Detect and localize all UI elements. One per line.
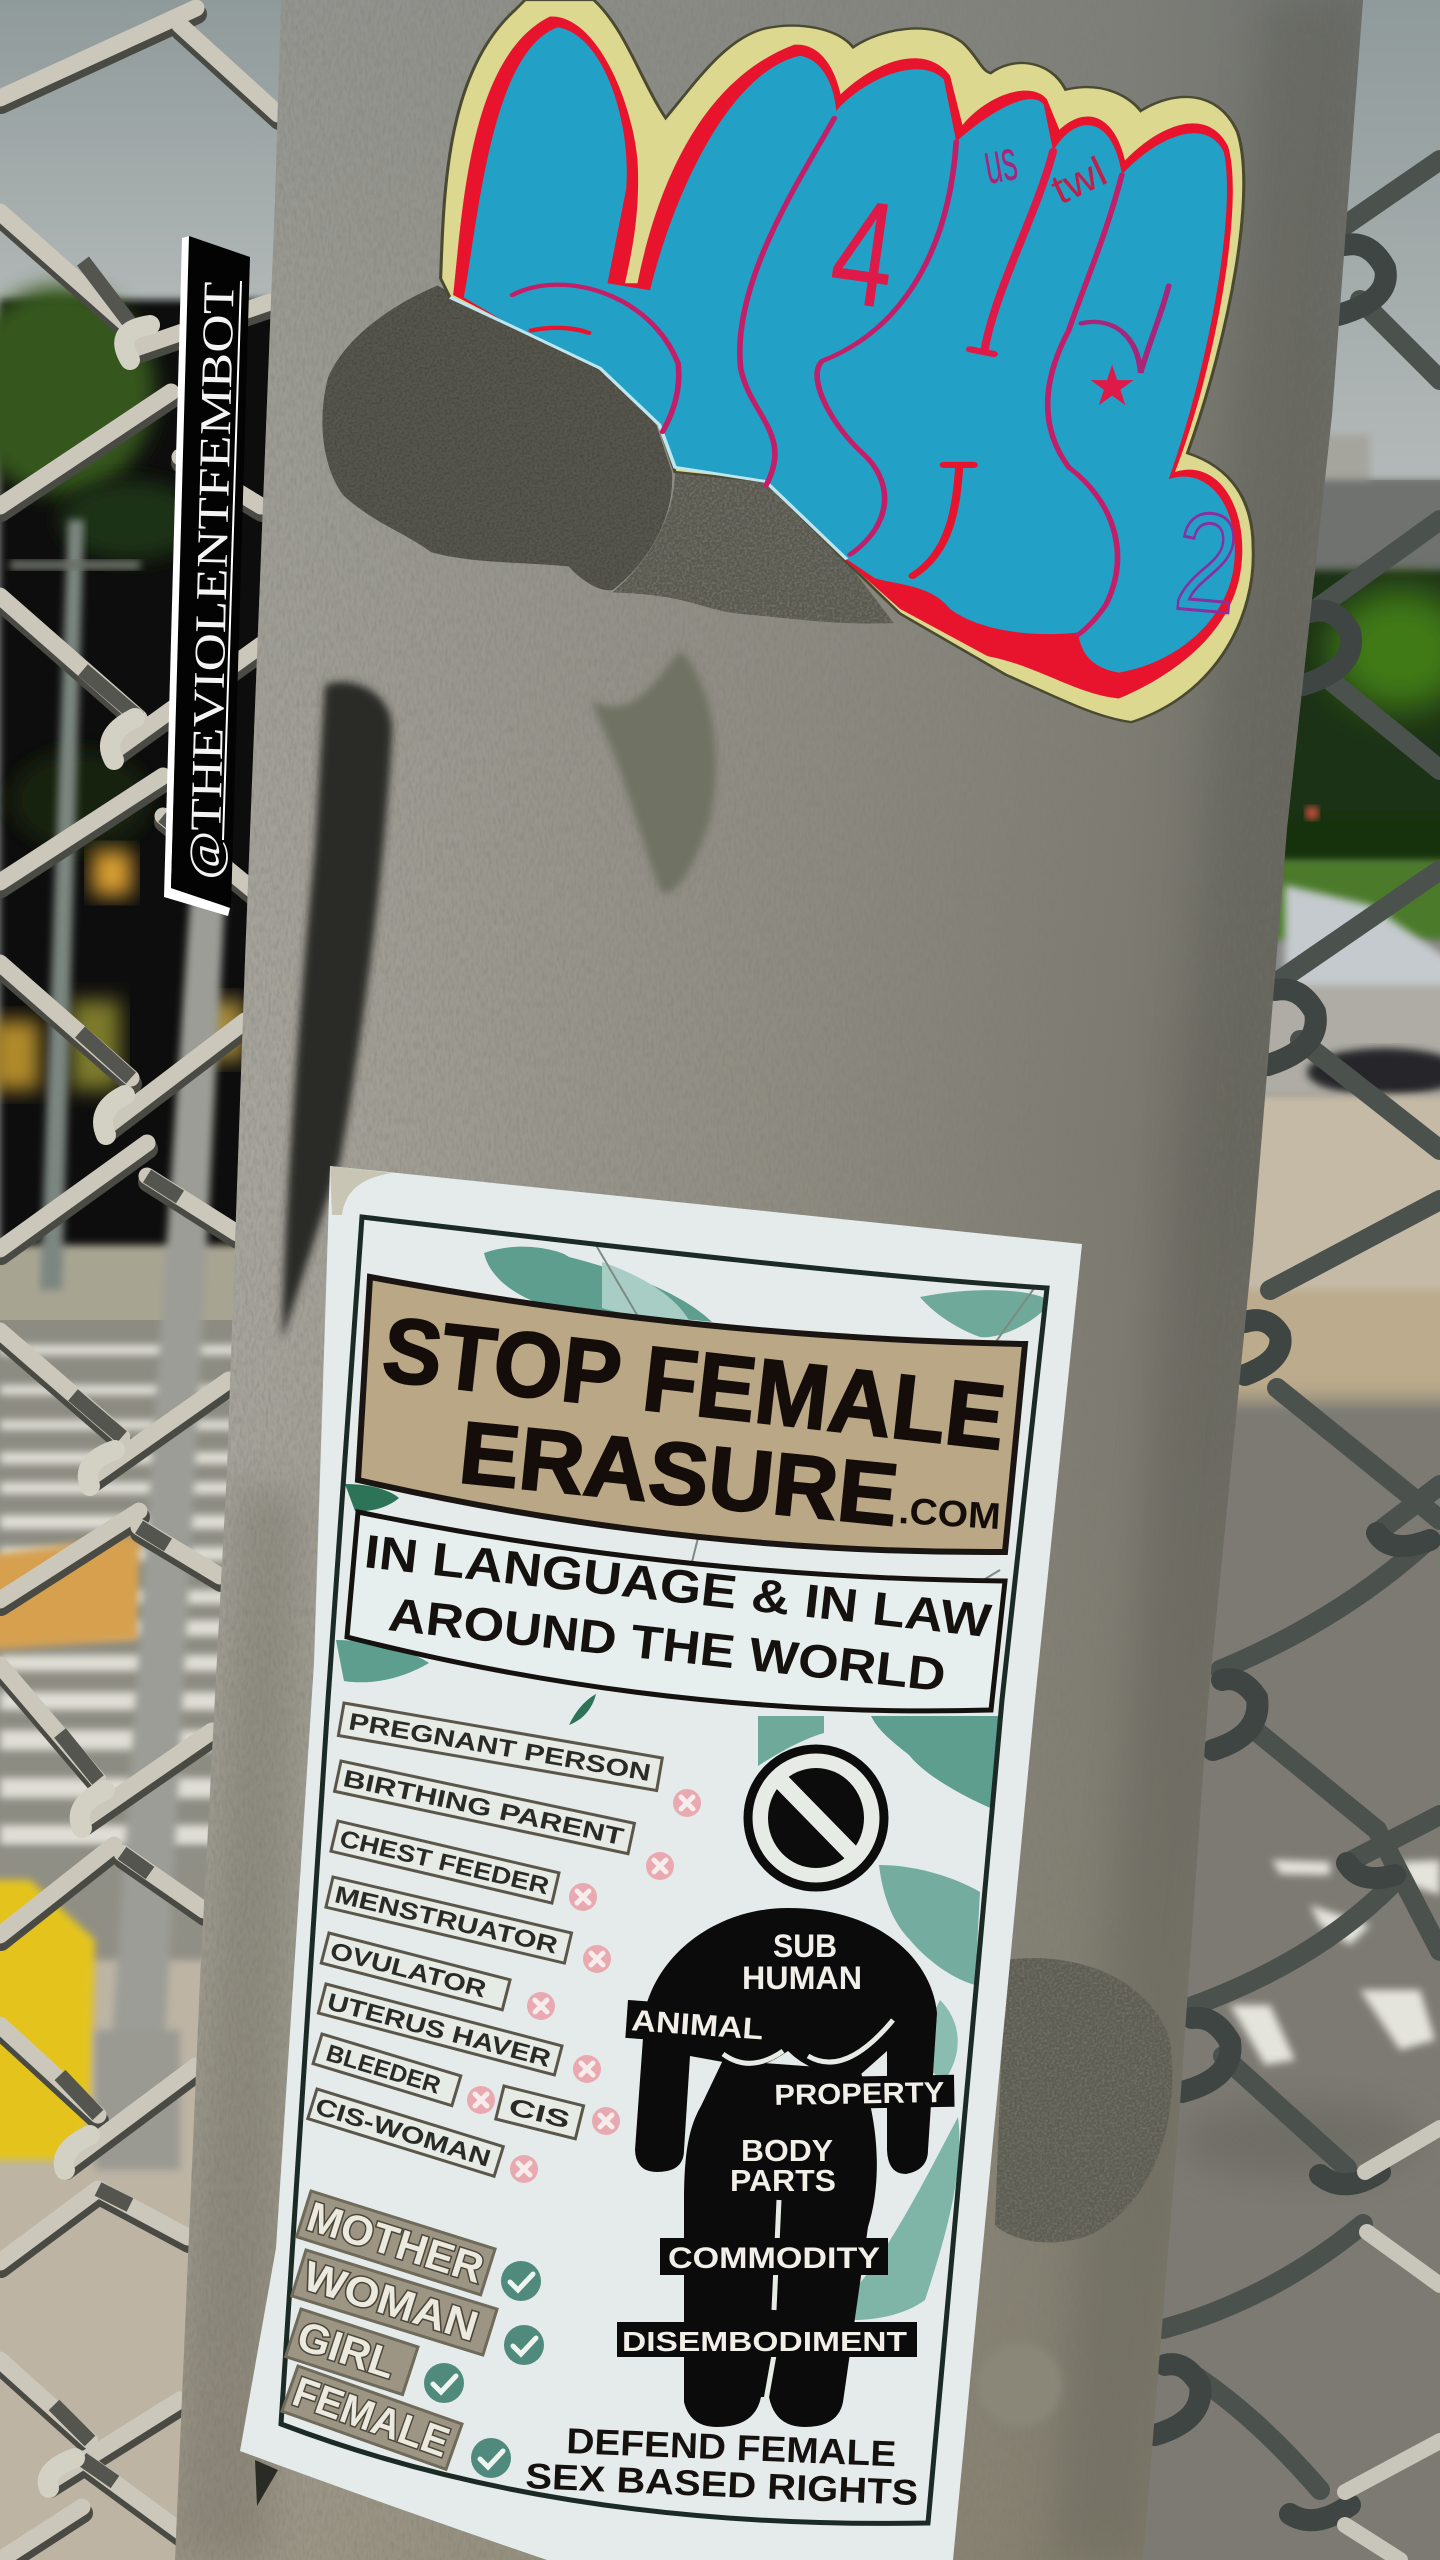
term: birthing parent <box>335 1761 634 1854</box>
silhouette lower body and legs <box>684 2060 877 2427</box>
term: ovulator <box>321 1933 510 2010</box>
poster frame <box>281 1217 1047 2523</box>
poster paper <box>240 1166 1082 2560</box>
figure label: body parts <box>730 2133 836 2198</box>
icon: prohibition symbol <box>748 1749 884 1887</box>
figure label: disembodiment: DISEMBODIMENT <box>622 2326 907 2357</box>
watermark banner <box>164 236 250 916</box>
footer line 2: SEX BASED RIGHTS <box>525 2455 919 2513</box>
sticker tag: us: us <box>979 127 1022 197</box>
term: uterus haver: UTERUS HAVER <box>324 1988 554 2073</box>
graffiti sticker <box>441 0 1253 722</box>
term: menstruator: MENSTRUATOR <box>332 1881 560 1960</box>
term: female: FEMALE <box>287 2368 455 2466</box>
background: right side <box>1100 0 1440 2560</box>
subtitle line 2: AROUND THE WORLD <box>386 1587 948 1701</box>
silhouette upper body and arms <box>635 1908 937 2174</box>
sticker blue letters <box>464 27 1235 673</box>
term: chest feeder: CHEST FEEDER <box>337 1825 552 1900</box>
term: chest feeder <box>331 1821 559 1903</box>
list of rejected terms <box>308 1703 662 2176</box>
pole marks: grey scuff <box>590 650 716 894</box>
figure label: sub human: HUMAN <box>742 1960 862 1996</box>
chain-link fence: right dark wires <box>1155 160 1440 2560</box>
figure label: property: PROPERTY <box>774 2077 945 2112</box>
figure label: body parts: BODY <box>741 2133 833 2168</box>
sticker red layer <box>453 16 1242 699</box>
icons: green check marks <box>424 2261 544 2478</box>
chain-link fence: left light wires <box>0 8 279 2560</box>
title panel <box>358 1277 1025 1552</box>
sticker border <box>441 0 1253 722</box>
sticker letter lines <box>512 118 1169 635</box>
list of accepted terms <box>282 2191 497 2469</box>
term: cis-woman <box>308 2089 503 2176</box>
footer text <box>525 2420 919 2513</box>
pole marks: black streak <box>282 682 392 1340</box>
poster leaves <box>336 1235 1050 2320</box>
background: left side <box>0 0 320 2560</box>
subtitle box <box>347 1512 1005 1711</box>
title line 1: STOP FEMALE <box>378 1299 1010 1470</box>
subtitle panel <box>347 1512 1005 1711</box>
term: cis <box>496 2086 584 2139</box>
sticker tag: 2: 2 <box>1169 481 1245 643</box>
banner black strip <box>171 236 250 908</box>
banner handle: @THEVIOLENTFEMBOT <box>180 281 244 880</box>
term: girl: GIRL <box>292 2312 402 2387</box>
term: birthing parent: BIRTHING PARENT <box>341 1765 626 1851</box>
term: pregnant person <box>338 1703 662 1790</box>
term: woman: WOMAN <box>298 2252 484 2350</box>
figure label: animal: ANIMAL <box>630 2004 764 2046</box>
term: uterus haver <box>318 1984 562 2075</box>
title line 2: ERASURE <box>455 1402 903 1545</box>
term: pregnant person: PREGNANT PERSON <box>347 1708 653 1787</box>
pole marks: rough patch and round plug <box>990 1958 1172 2422</box>
figure label: sub human: SUB <box>773 1928 837 1964</box>
term: cis-woman: CIS-WOMAN <box>312 2093 494 2173</box>
term: cis: CIS <box>506 2093 573 2134</box>
banner white edge <box>164 236 230 916</box>
subtitle line 1: IN LANGUAGE & IN LAW <box>362 1524 995 1647</box>
sticker tag: twl: twl <box>1044 147 1114 213</box>
figure label: commodity: COMMODITY <box>668 2242 880 2275</box>
silhouette white details <box>723 2020 893 2400</box>
term: menstruator <box>326 1877 572 1963</box>
pole marks: torn sticker patches <box>310 280 920 640</box>
term: bleeder: BLEEDER <box>323 2040 444 2100</box>
figure label: sub human <box>742 1928 862 1996</box>
figure label: body parts: PARTS <box>730 2163 836 2198</box>
footer line 1: DEFEND FEMALE <box>566 2420 897 2474</box>
term: mother: MOTHER <box>302 2193 489 2292</box>
poster sheet <box>240 1166 1082 2560</box>
icons: red X marks <box>467 1789 701 2183</box>
title .com: .COM <box>898 1490 1002 1537</box>
term: bleeder <box>313 2034 461 2106</box>
sticker tag: star: ★ <box>1087 354 1137 419</box>
figure: black silhouette of a woman <box>617 1908 955 2427</box>
sticker tag: 4: 4 <box>822 165 906 340</box>
title box <box>358 1277 1025 1552</box>
term: ovulator: OVULATOR <box>327 1937 489 2004</box>
